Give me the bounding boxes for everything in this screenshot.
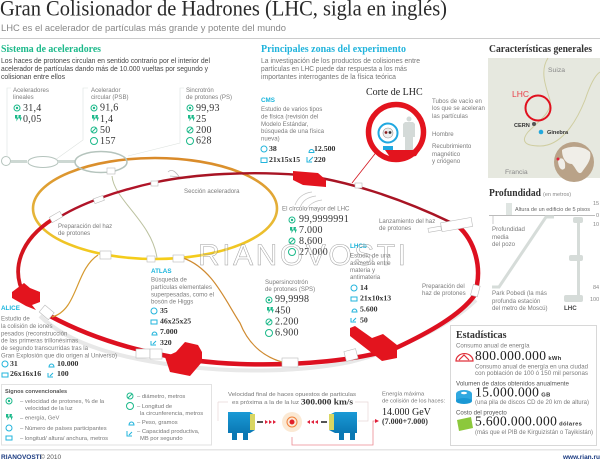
label: preparación del haz (right): haz de protones — [422, 290, 466, 297]
LHC main ring — [18, 173, 478, 364]
legend panel: Signos convencionales — [5, 389, 67, 395]
callout: SPS: 99,9998 — [275, 294, 309, 305]
callout: ALICE: de las primeras trillonésimas — [1, 338, 78, 344]
text: zonas intro: La investigación de los productos de colisiones entre — [261, 58, 420, 65]
text: zonas intro — [261, 58, 420, 81]
text: sistema intro: colisionan entre ellos — [1, 74, 65, 81]
label: lanzamiento del haz: de protones — [379, 225, 411, 232]
text: zonas intro: partículas en LHC puede dar respuesta a los más — [261, 66, 407, 73]
callout: sincrotrón PS: 200 — [196, 125, 212, 136]
yellow pre-accelerator ring — [33, 158, 277, 259]
panel: estadísticas: Volumen de datos obtenidos anualmente — [456, 380, 570, 388]
label: preparación del haz (right) — [422, 283, 466, 297]
label: preparación del haz (left): de protones — [58, 230, 90, 237]
callout: ALICE: ALICE — [1, 305, 20, 312]
callout: ALICE: Estudio de — [1, 316, 30, 322]
legend panel: – Peso, gramos — [137, 420, 178, 426]
magnet left — [228, 412, 255, 440]
callout: LHCb: asimetría entre — [350, 260, 391, 267]
speed panel: Energía máxima — [382, 392, 425, 398]
callout: ATLAS: bosón de Higgs — [151, 298, 193, 306]
legend panel: – diámetro, metros — [137, 394, 185, 400]
callout: aceleradores lineales — [13, 87, 49, 125]
arrow: left beam — [265, 420, 276, 424]
depth chart: Park Pobedi (la más — [492, 290, 547, 297]
callout: acelerador circular PSB: 50 — [100, 125, 110, 136]
callout: LHCb: 50 — [360, 316, 368, 324]
speed panel: 14.000 GeV — [382, 407, 432, 418]
depth chart: 100 — [590, 297, 599, 303]
label: lanzamiento del haz: Lanzamiento del haz — [379, 218, 435, 225]
callout: acelerador circular PSB: circular (PSB) — [91, 94, 129, 101]
callout: aceleradores lineales: 31,4 — [23, 103, 42, 114]
SPS link — [183, 258, 282, 362]
globe — [554, 142, 594, 182]
depth chart: 84 — [593, 285, 599, 291]
callout: LHCb: antimateria — [350, 274, 381, 281]
callout: ATLAS: Búsqueda de — [151, 276, 188, 284]
callout: LHCb: 14 — [360, 283, 368, 292]
footer credit — [1, 453, 61, 461]
callout: acelerador circular PSB: 91,6 — [100, 102, 118, 114]
magnet right — [329, 412, 357, 440]
callout: sincrotrón PS: 25 — [196, 114, 206, 125]
ring shadow — [40, 300, 476, 371]
callout: círculo mayor LHC: 27.000 — [299, 247, 328, 258]
callout: LHCb: LHCb — [350, 243, 367, 250]
speed panel: de colisión de los haces: — [382, 398, 446, 404]
CMS block: 21x15x15 — [269, 155, 300, 164]
callout: sincrotrón PS: de protones (PS) — [186, 94, 232, 101]
callout: ATLAS: superpesadas, como el — [151, 292, 214, 298]
panel: estadísticas: Costo del proyecto — [456, 410, 507, 416]
heading: corte de LHC: Corte de LHC — [366, 87, 423, 98]
callout: ATLAS — [151, 268, 214, 347]
collision — [282, 412, 302, 432]
callout: SPS: Supersincrotrón — [265, 279, 308, 286]
footer credit: © 2010 — [40, 453, 61, 461]
legend panel: – energía, GeV — [20, 416, 59, 422]
beam junction boxes — [39, 181, 480, 367]
label: lanzamiento del haz — [379, 218, 435, 232]
section of LHC: Recubrimiento — [432, 143, 472, 150]
panel: estadísticas: (más que el PIB de Kirguizistán o Tayikistán) — [475, 429, 593, 436]
callout: SPS: 450 — [275, 306, 291, 316]
ALICE detector — [12, 283, 40, 310]
callout: ALICE: 31 — [10, 359, 18, 368]
callout: ALICE: de segundo transcurridas tras la — [1, 345, 89, 352]
callout: sincrotrón PS — [186, 87, 232, 146]
callout: LHCb: 5.600 — [360, 304, 378, 314]
section of LHC: y criógeno — [432, 158, 461, 165]
map label: Francia: Francia — [505, 169, 528, 176]
callout: ATLAS: 46x25x25 — [160, 316, 191, 326]
panel: estadísticas: 800.000.000 kWh — [475, 348, 562, 363]
legend panel: MB por segundo — [140, 436, 183, 442]
callout: SPS: 6.900 — [275, 328, 299, 338]
section of LHC — [366, 87, 485, 165]
depth chart — [489, 201, 599, 312]
CMS block: 220 — [314, 155, 326, 164]
callout: acelerador circular PSB: 1,4 — [100, 114, 113, 125]
callout: LHCb — [350, 243, 391, 324]
callout: ALICE: 100 — [57, 369, 69, 378]
heading: sistema de aceleradores: Sistema de aceleradores — [1, 44, 101, 55]
callout: círculo mayor LHC: 7.000 — [299, 225, 323, 236]
text: sistema intro: Los haces de protones circulan en sentido contrario por el interior del — [1, 58, 210, 65]
map — [488, 58, 600, 182]
legend panel: – longitud/ altura/ anchura, metros — [20, 436, 108, 442]
callout: ATLAS: 35 — [160, 306, 168, 315]
callout: acelerador circular PSB: 157 — [100, 136, 116, 147]
section arcs — [295, 192, 322, 211]
callout: LHCb: materia y — [350, 267, 376, 274]
CMS block: búsqueda de una física — [261, 128, 325, 135]
section of LHC: las partículas — [432, 113, 468, 120]
ATLAS detector — [165, 342, 202, 376]
legend panel: velocidad de la luz — [25, 406, 73, 412]
callout: círculo mayor LHC: El círculo mayor del LHC — [282, 206, 350, 212]
subtitle: LHC es el acelerador de partículas más grande y potente del mundo — [1, 23, 286, 34]
callout: acelerador circular PSB: Acelerador — [91, 87, 120, 94]
depth chart: Profundidad — [492, 226, 525, 233]
section of LHC: magnético — [432, 151, 461, 158]
callout: ALICE: pesados (reconstrucción — [1, 330, 67, 338]
CMS detector — [293, 171, 326, 187]
heading: profundidad — [489, 188, 571, 199]
LHC ring on map — [526, 96, 550, 120]
CMS block: 12.500 — [314, 144, 336, 153]
Ginebra marker: Ginebra — [547, 130, 569, 136]
label: sección aceleradora: Sección aceleradora — [184, 188, 240, 195]
panel: estadísticas: 15.000.000 GB — [475, 384, 551, 400]
legend panel: – velocidad de protones, % de la — [20, 399, 105, 405]
callout: círculo mayor LHC — [282, 206, 350, 258]
callout: círculo mayor LHC: 8.600 — [299, 236, 323, 247]
panel: estadísticas: Consumo anual de energía — [456, 342, 530, 350]
CMS block: CMS — [261, 97, 275, 104]
CMS block: Estudio de varios tipos — [261, 106, 322, 113]
text: zonas intro: importantes interrogantes de la física teórica — [261, 74, 396, 81]
callout: ATLAS: 320 — [160, 338, 172, 347]
callout: aceleradores lineales: 0,05 — [23, 114, 42, 125]
label: preparación del haz (right): Preparación del — [422, 283, 465, 290]
depth chart: profunda estación — [492, 298, 540, 305]
callout: ALICE — [1, 305, 117, 378]
section of LHC: los que se aceleran — [432, 105, 485, 112]
speed panel: 300.000 km/s — [301, 398, 353, 406]
accelerator chain — [2, 88, 190, 258]
legend panel: la circunferencia, metros — [140, 411, 203, 417]
LHCb detector — [350, 326, 397, 361]
depth chart: del pozo — [492, 241, 516, 248]
speed panel: (7.000+7.000) — [382, 417, 428, 426]
legend panel — [2, 384, 212, 445]
legend panel: – Longitud de — [137, 404, 172, 410]
text: sistema intro — [1, 58, 210, 81]
callout: aceleradores lineales: Aceleradores — [13, 87, 49, 94]
callout: ALICE: la colisión de iones — [1, 323, 52, 330]
depth chart: Altura de un edificio de 5 pisos — [515, 207, 590, 213]
section of LHC: Tubos de vacío en — [432, 98, 482, 105]
footer credit: RIANOVOSTI — [1, 454, 42, 461]
depth chart: del metro de Moscú) — [492, 305, 548, 312]
CMS block: Modelo Estándar, — [261, 121, 309, 128]
heading: principales zonas: Principales zonas del experimento — [261, 44, 406, 55]
callout: círculo mayor LHC: 99,9999991 — [299, 214, 349, 225]
CERN marker: CERN — [514, 123, 530, 129]
callout: SPS — [265, 279, 315, 338]
depth chart: 0 — [596, 213, 599, 219]
depth chart: LHC — [564, 305, 577, 312]
callout: LHCb: 21x10x13 — [360, 294, 391, 302]
red connector to section — [352, 150, 378, 183]
speed panel — [218, 392, 446, 445]
icon: discs — [456, 390, 472, 404]
callout: SPS: de protones (SPS) — [265, 286, 315, 293]
footer url: www.rian.ru — [562, 454, 600, 461]
callout: sincrotrón PS: Sincrotrón — [186, 87, 214, 94]
CMS block — [261, 97, 336, 164]
map label: LHC: LHC — [512, 89, 529, 99]
callout: LHCb: Estudio de una — [350, 252, 391, 260]
depth chart: 15 — [593, 201, 599, 207]
section of LHC: Hombre — [432, 131, 454, 138]
callout: ATLAS: partículas elementales — [151, 284, 212, 291]
text: sistema intro: acelerador de partículas dando más de 10.000 vueltas por segundo y — [1, 66, 208, 73]
legend panel: – Capacidad productiva, — [137, 429, 200, 435]
callout: ATLAS: 7.000 — [160, 327, 178, 336]
heading: profundidad: Profundidad — [489, 188, 541, 199]
depth chart: media — [492, 234, 509, 241]
callout: ATLAS: ATLAS — [151, 268, 172, 275]
icon: meter — [456, 354, 473, 361]
label: preparación del haz (left) — [58, 223, 112, 237]
arrow: right beam — [307, 420, 318, 424]
callout: ALICE: 10.000 — [57, 359, 79, 368]
map label: Suiza: Suiza — [548, 67, 565, 74]
panel: estadísticas — [450, 326, 596, 446]
CMS block: 38 — [269, 144, 277, 153]
callout: aceleradores lineales: lineales — [13, 94, 34, 101]
ALICE link — [52, 255, 98, 317]
legend panel: – Número de países participantes — [20, 426, 107, 432]
callout: sincrotrón PS: 99,93 — [196, 103, 220, 114]
panel: estadísticas: con población de 100 ó 150 mil personas — [475, 370, 588, 377]
callout: ALICE: 26x16x16 — [10, 369, 41, 378]
speed panel: Velocidad final de haces opuestos de particulas — [228, 392, 356, 398]
panel: estadísticas: 5.600.000.000 dólares — [475, 414, 582, 428]
watermark: RIANOVOSTI — [198, 239, 406, 272]
callout: ALICE: Gran Explosión que dio origen al Universo) — [1, 352, 117, 360]
depth chart: 10 — [593, 222, 599, 228]
callout: sincrotrón PS: 628 — [196, 136, 212, 146]
callout: SPS: 2.200 — [275, 316, 299, 328]
CMS block: de física (revisión del — [261, 114, 318, 120]
heading: profundidad: (en metros) — [543, 192, 571, 198]
label: preparación del haz (left): Preparación del haz — [58, 223, 112, 230]
heading: características generales: Características generales — [489, 44, 592, 55]
CMS block: nueva) — [261, 136, 280, 142]
panel: estadísticas: (una pila de discos CD de 20 km de altura) — [475, 399, 589, 406]
icon: banknote — [457, 417, 473, 431]
heading: estadísticas: Estadísticas — [456, 330, 507, 341]
callout: acelerador circular PSB — [90, 87, 129, 147]
panel: estadísticas: Consumo anual de energía en una ciudad — [475, 364, 588, 370]
speed panel: es próxima a la de la luz — [232, 400, 299, 406]
